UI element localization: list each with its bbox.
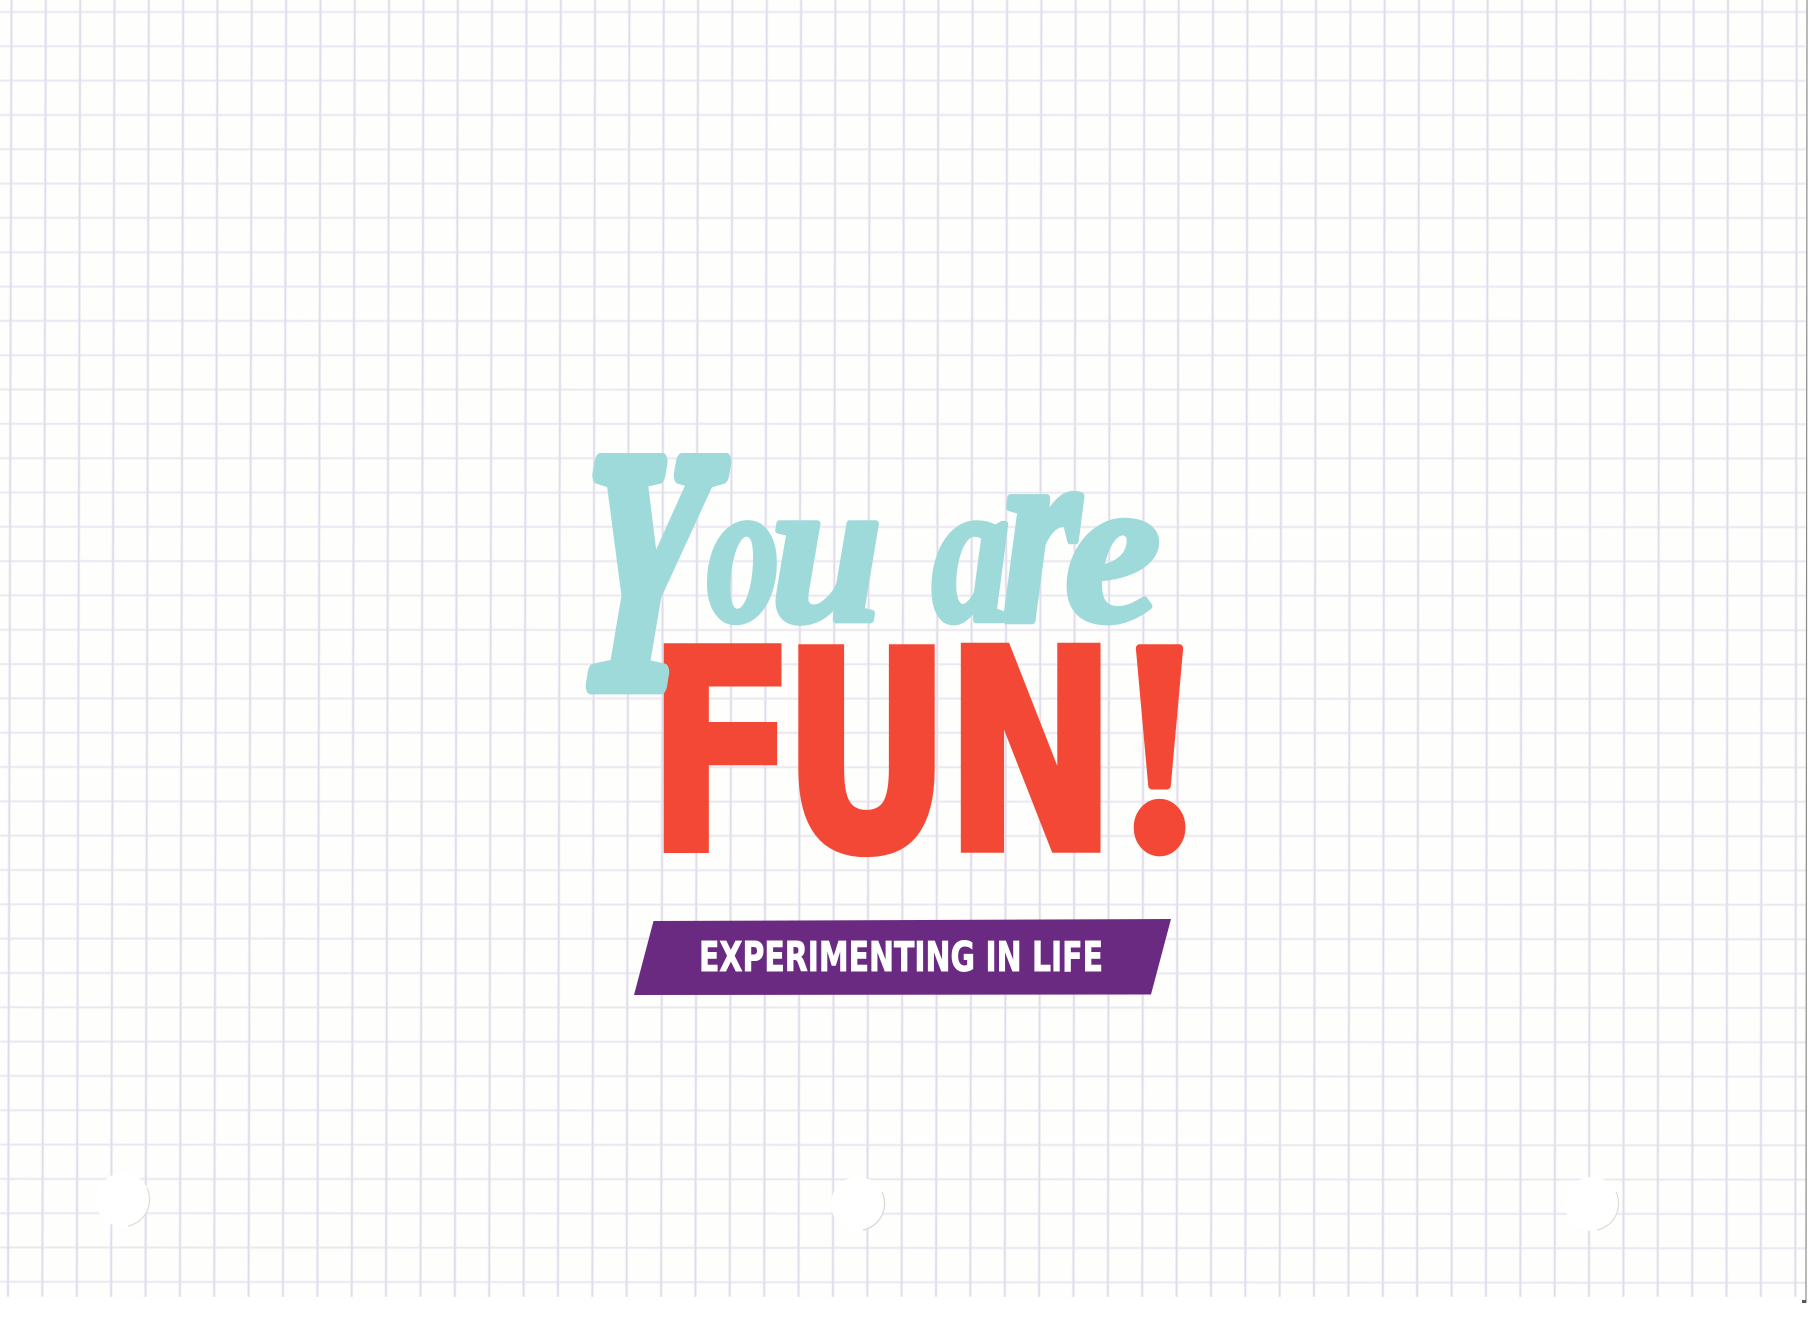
- script heading: You are: u: [771, 434, 882, 666]
- punched hole: left: [96, 1173, 150, 1227]
- script heading: You are: o: [707, 439, 780, 665]
- script heading: You are: e: [1065, 433, 1160, 665]
- script heading: You are: Y: [569, 383, 731, 759]
- headline word: FUN!: N: [946, 594, 1116, 914]
- script heading: You are: [569, 383, 1160, 759]
- banner label: EXPERIMENTING IN LIFE: [699, 933, 1103, 981]
- punched hole: middle: [831, 1177, 885, 1231]
- punched hole: right: [1565, 1177, 1619, 1231]
- paper right edge: [1802, 0, 1807, 1303]
- headline word: FUN!: F: [644, 588, 799, 919]
- purple banner: [634, 919, 1171, 995]
- headline word: FUN!: [644, 576, 1205, 919]
- script heading: You are: r: [1002, 384, 1082, 678]
- headline word: FUN!: U: [783, 595, 950, 914]
- script heading: You are: a: [932, 438, 1009, 665]
- headline word: FUN!: !: [1114, 576, 1205, 914]
